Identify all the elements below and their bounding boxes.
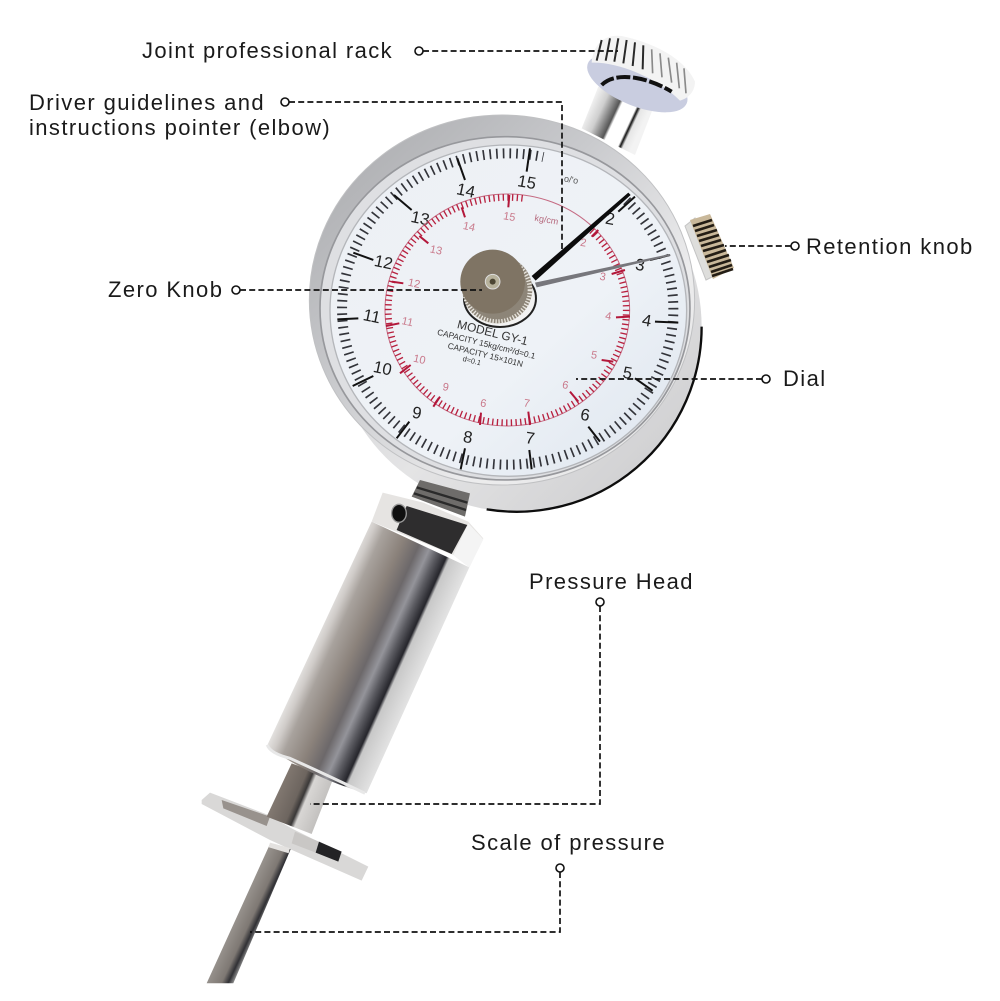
red scale numbers <box>401 210 612 410</box>
callout: Driver guidelines and instructions pointer: Driver guidelines and <box>29 90 265 115</box>
callout: Joint professional rack <box>142 38 618 63</box>
cylinder <box>267 493 483 793</box>
outer scale numbers: 4 <box>641 310 653 331</box>
icon: retention knob <box>685 214 734 280</box>
callout: Joint professional rack: Joint professional rack <box>142 38 393 63</box>
knob screw <box>485 274 500 289</box>
model text: CAPACITY 15kg/cm²/d=0.1 <box>436 327 537 361</box>
red scale numbers: 15 <box>502 210 516 224</box>
lower rod <box>207 844 291 983</box>
outer scale numbers: 5 <box>621 363 634 383</box>
model text <box>432 313 540 380</box>
red scale numbers: 4 <box>604 310 612 323</box>
flange dark notch <box>316 842 342 862</box>
thread <box>412 480 470 517</box>
callout: Driver guidelines and instructions pointer: instructions pointer (elbow) <box>29 115 331 140</box>
cylinder barrel <box>267 522 469 793</box>
red scale numbers: 6 <box>561 379 569 392</box>
barrel bottom lip <box>267 745 365 793</box>
bezel inner ring <box>320 137 690 480</box>
casing dark edge <box>487 327 702 512</box>
red scale numbers: 9 <box>442 381 450 394</box>
callout: Scale of pressure <box>250 830 666 932</box>
outer major ticks <box>337 148 678 469</box>
callout: Dial: Dial <box>783 366 826 391</box>
outer scale numbers: 7 <box>524 428 536 448</box>
unit labels: o/'o <box>563 174 579 186</box>
casing <box>332 142 702 512</box>
knurl grooves dark <box>597 38 643 69</box>
red scale numbers: 11 <box>401 315 414 329</box>
flange disc <box>202 793 368 881</box>
gray pointer <box>535 254 671 287</box>
outer scale numbers: 8 <box>462 427 474 447</box>
outer scale numbers: 14 <box>455 179 477 202</box>
knob silver base <box>685 218 716 280</box>
stem shaft <box>267 763 333 834</box>
outer scale numbers: 6 <box>579 405 591 425</box>
outer scale numbers <box>361 171 653 448</box>
top collar <box>372 493 483 567</box>
knob underside <box>579 42 695 124</box>
callout: Zero Knob: Zero Knob <box>108 277 223 302</box>
outer scale numbers: 13 <box>409 207 431 229</box>
lower cylinder assembly <box>207 480 483 983</box>
screw hole <box>392 504 406 522</box>
gauge body with dial <box>309 115 702 512</box>
flange and stem <box>202 763 368 881</box>
red scale numbers: 5 <box>590 349 598 362</box>
red scale numbers: 14 <box>462 220 476 234</box>
red scale ring <box>385 194 630 426</box>
outer scale numbers: 10 <box>372 357 394 379</box>
callout: Pressure Head: Pressure Head <box>529 569 694 594</box>
knob knurl <box>462 255 532 323</box>
red scale numbers: 10 <box>412 353 427 367</box>
knob grooves <box>693 220 733 276</box>
red major ticks <box>386 195 630 425</box>
callout: Driver guidelines and instructions pointer <box>29 90 562 250</box>
outer scale numbers: 15 <box>516 171 538 193</box>
outer minor ticks <box>342 153 673 465</box>
red scale numbers: 13 <box>429 243 443 258</box>
outer scale numbers: 11 <box>361 305 382 327</box>
outer scale numbers: 2 <box>604 209 616 229</box>
callout: Pressure Head <box>310 569 694 804</box>
red scale numbers: 7 <box>523 397 531 410</box>
knob collar <box>602 77 672 92</box>
callout: Retention knob: Retention knob <box>806 234 974 259</box>
flange right shade <box>292 832 319 853</box>
knob knurl <box>592 36 695 101</box>
knob knurl <box>690 214 734 279</box>
red scale numbers: 6 <box>479 397 487 410</box>
zero knob <box>460 250 536 327</box>
unit labels <box>534 174 579 227</box>
knob shadow base <box>464 270 536 327</box>
icon: top knurled knob and post <box>579 36 695 155</box>
red scale numbers: 12 <box>407 277 421 291</box>
post <box>582 87 655 155</box>
bezel <box>309 115 695 485</box>
knurl grooves light <box>652 49 686 93</box>
unit labels: kg/cm <box>534 213 559 227</box>
outer scale numbers: 3 <box>634 255 646 275</box>
outer scale numbers: 9 <box>411 403 423 423</box>
red scale numbers: 3 <box>599 271 607 284</box>
callout: Scale of pressure: Scale of pressure <box>471 830 666 855</box>
knob cap <box>460 250 525 314</box>
model text: MODEL GY-1 <box>456 317 530 348</box>
callout: Retention knob <box>725 234 974 259</box>
callout: Dial <box>576 366 826 391</box>
red scale numbers: 2 <box>579 237 587 250</box>
flange left shade <box>222 800 270 826</box>
outer scale numbers: 12 <box>373 251 395 273</box>
callout: Zero Knob <box>108 277 482 302</box>
model text: d=0.1 <box>462 354 482 367</box>
dial face <box>330 145 687 476</box>
model text: CAPACITY 15×101N <box>447 340 524 369</box>
black pointer <box>532 193 631 281</box>
red minor ticks <box>388 197 626 423</box>
